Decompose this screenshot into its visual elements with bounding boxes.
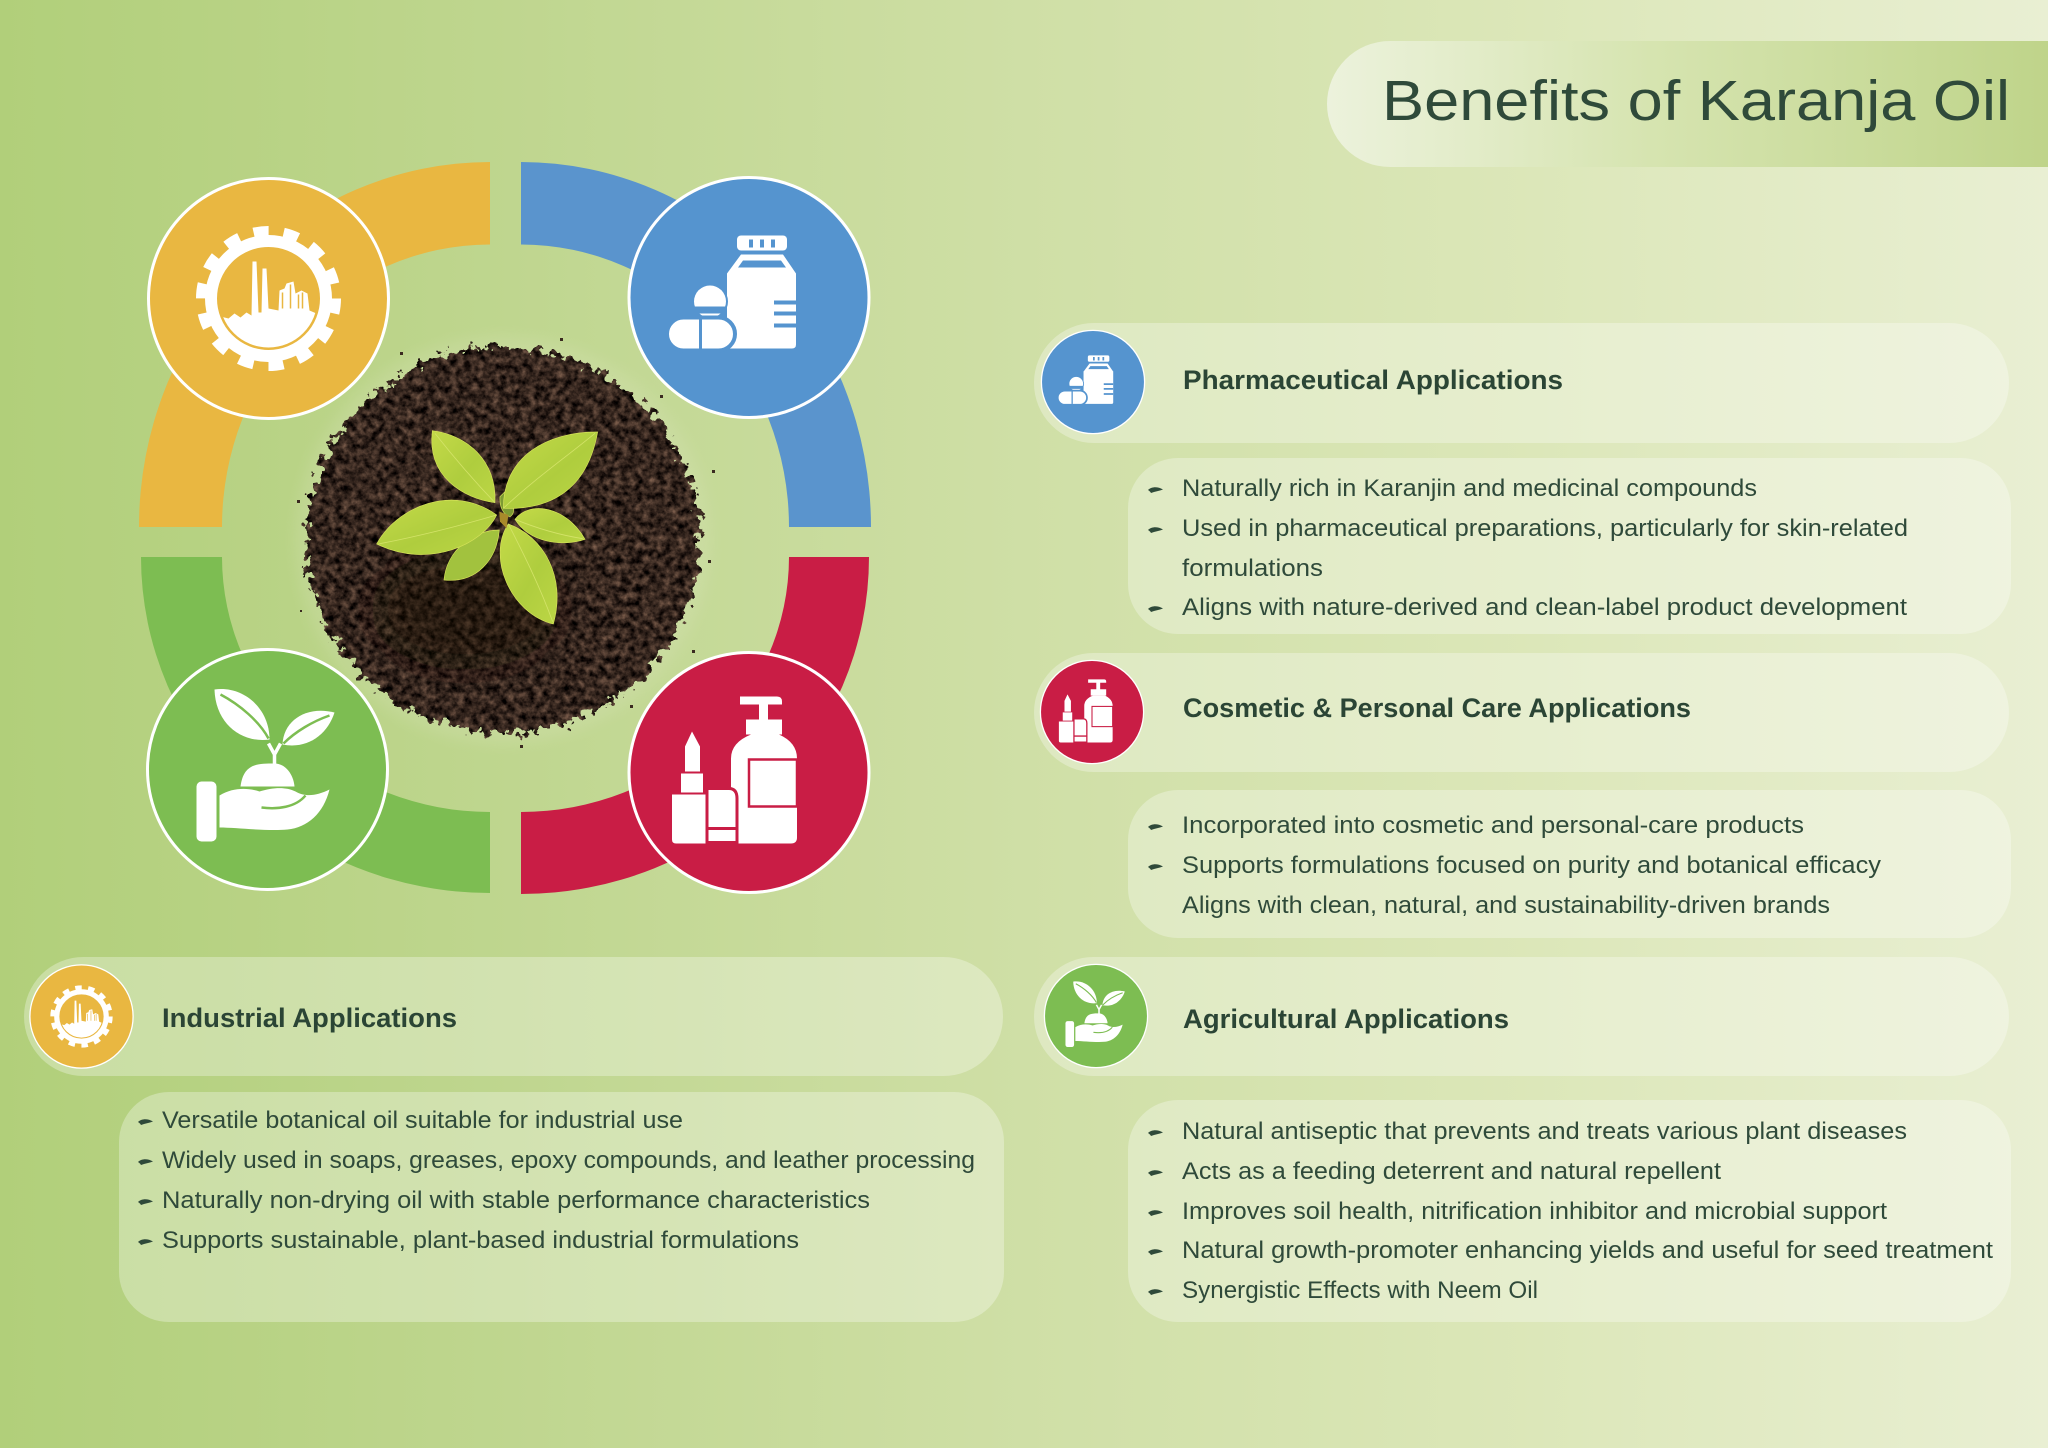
icon: industrial gear small bbox=[30, 965, 133, 1068]
heading: Pharmaceutical Applications bbox=[1183, 365, 1563, 395]
panel: agricultural applications bbox=[1034, 957, 2011, 1322]
bullet list: Naturally rich in Karanjin and medicinal compounds bbox=[1182, 475, 1757, 502]
arc: industrial bbox=[139, 162, 490, 527]
icon: cosmetics small bbox=[1040, 660, 1144, 764]
arc: cosmetic bbox=[521, 557, 869, 894]
header pill bbox=[1034, 653, 2009, 772]
bullet list: formulations bbox=[1182, 555, 1323, 582]
list box bbox=[1128, 1100, 2011, 1322]
title: Benefits of Karanja Oil bbox=[1382, 69, 2010, 133]
panel: pharmaceutical applications bbox=[1034, 323, 2011, 634]
bullet list: Versatile botanical oil suitable for industrial use bbox=[162, 1107, 683, 1134]
bullet list: Incorporated into cosmetic and personal-care products bbox=[1182, 812, 1804, 839]
bullet list: Natural growth-promoter enhancing yields and useful for seed treatment bbox=[1182, 1237, 1993, 1264]
heading: Agricultural Applications bbox=[1183, 1004, 1509, 1034]
icon: medicine bottle small bbox=[1041, 330, 1145, 434]
list box bbox=[1128, 790, 2011, 938]
bullet list: Natural antiseptic that prevents and treats various plant diseases bbox=[1182, 1118, 1907, 1145]
bullet list bbox=[1148, 475, 1908, 621]
icon: cosmetics bbox=[629, 652, 869, 892]
bullet list bbox=[138, 1107, 975, 1254]
heading: Cosmetic & Personal Care Applications bbox=[1183, 693, 1691, 723]
bullet list bbox=[1148, 812, 1881, 919]
bullet list: Naturally non-drying oil with stable performance characteristics bbox=[162, 1187, 870, 1214]
list box bbox=[1128, 458, 2011, 634]
ring diagram bbox=[139, 162, 871, 894]
bullet list: Supports sustainable, plant-based industrial formulations bbox=[162, 1227, 799, 1254]
header pill bbox=[24, 957, 1003, 1076]
list box bbox=[119, 1092, 1004, 1322]
bullet list bbox=[1148, 1118, 1993, 1304]
bullet list: Used in pharmaceutical preparations, particularly for skin-related bbox=[1182, 515, 1908, 542]
arc: agricultural bbox=[141, 557, 490, 893]
arc: pharmaceutical bbox=[521, 162, 871, 527]
bullet list: Synergistic Effects with Neem Oil bbox=[1182, 1277, 1538, 1304]
bullet list: Improves soil health, nitrification inhibitor and microbial support bbox=[1182, 1198, 1887, 1225]
bullet list: Aligns with clean, natural, and sustainability-driven brands bbox=[1182, 892, 1830, 919]
soil with seedling bbox=[295, 336, 715, 748]
seedling leaves bbox=[377, 431, 598, 624]
bullet list: Acts as a feeding deterrent and natural repellent bbox=[1182, 1158, 1721, 1185]
panel: cosmetic and personal care applications bbox=[1034, 653, 2011, 938]
bullet list: Widely used in soaps, greases, epoxy compounds, and leather processing bbox=[162, 1147, 975, 1174]
header pill bbox=[1034, 957, 2009, 1076]
title bbox=[1327, 41, 2048, 167]
bullet list: Supports formulations focused on purity and botanical efficacy bbox=[1182, 852, 1881, 879]
bullet list: Aligns with nature-derived and clean-label product development bbox=[1182, 594, 1907, 621]
header pill bbox=[1034, 323, 2009, 443]
icon: plant in hand small bbox=[1044, 964, 1148, 1068]
icon: plant in hand bbox=[148, 650, 388, 890]
heading: Industrial Applications bbox=[162, 1003, 457, 1033]
panel: industrial applications bbox=[24, 957, 1004, 1322]
icon: industrial gear bbox=[148, 178, 388, 418]
icon: medicine bottle bbox=[629, 178, 869, 418]
